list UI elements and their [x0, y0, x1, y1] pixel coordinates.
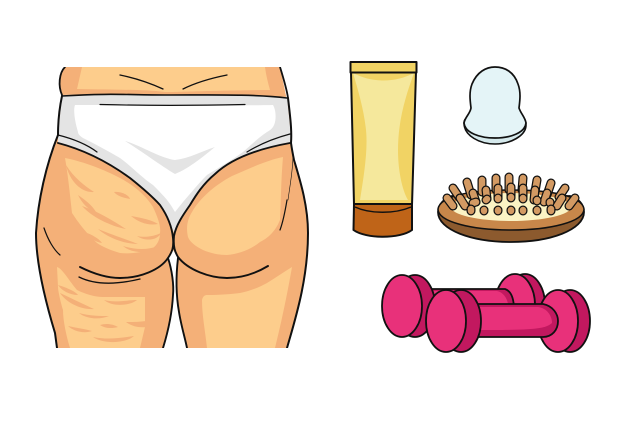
cellulite marks — [58, 165, 161, 342]
white gap at top — [50, 62, 290, 67]
panties white panel — [74, 105, 276, 212]
tube crimp — [350, 62, 416, 72]
brush pins — [447, 177, 575, 211]
icon: cream tube — [350, 62, 416, 237]
back dumbbell far weight — [495, 274, 545, 336]
icon: pink dumbbells — [382, 274, 590, 352]
white edge at bottom — [50, 348, 300, 352]
icon: silicone massage cup — [464, 67, 526, 144]
front dumbbell bar highlight — [480, 307, 552, 330]
panties fold — [125, 141, 215, 174]
back dumbbell near weight — [382, 275, 435, 337]
left thigh cellulite highlight — [57, 267, 145, 348]
figure: hips with cellulite — [36, 62, 308, 352]
right buttock highlight — [187, 157, 283, 255]
skin base — [36, 67, 308, 348]
cup base — [464, 116, 526, 144]
tube cap — [354, 204, 412, 237]
brush top — [438, 190, 584, 230]
panties — [58, 95, 291, 233]
right thigh highlight — [202, 267, 292, 348]
outlines — [36, 67, 308, 348]
front dumbbell bar — [470, 304, 558, 337]
icon: wooden massage brush — [438, 177, 584, 242]
tube body — [351, 72, 416, 205]
back dumbbell bar highlight — [432, 291, 508, 304]
brush pad — [451, 193, 571, 221]
brush base — [438, 196, 584, 242]
waist highlight — [77, 67, 270, 92]
tube rim — [355, 207, 411, 212]
back dumbbell bar — [425, 289, 514, 312]
cup dome — [464, 67, 526, 138]
front dumbbell near weight — [426, 290, 481, 352]
left buttock cellulite highlight — [65, 158, 160, 253]
front dumbbell far weight — [538, 290, 590, 352]
tube highlight — [353, 73, 414, 200]
